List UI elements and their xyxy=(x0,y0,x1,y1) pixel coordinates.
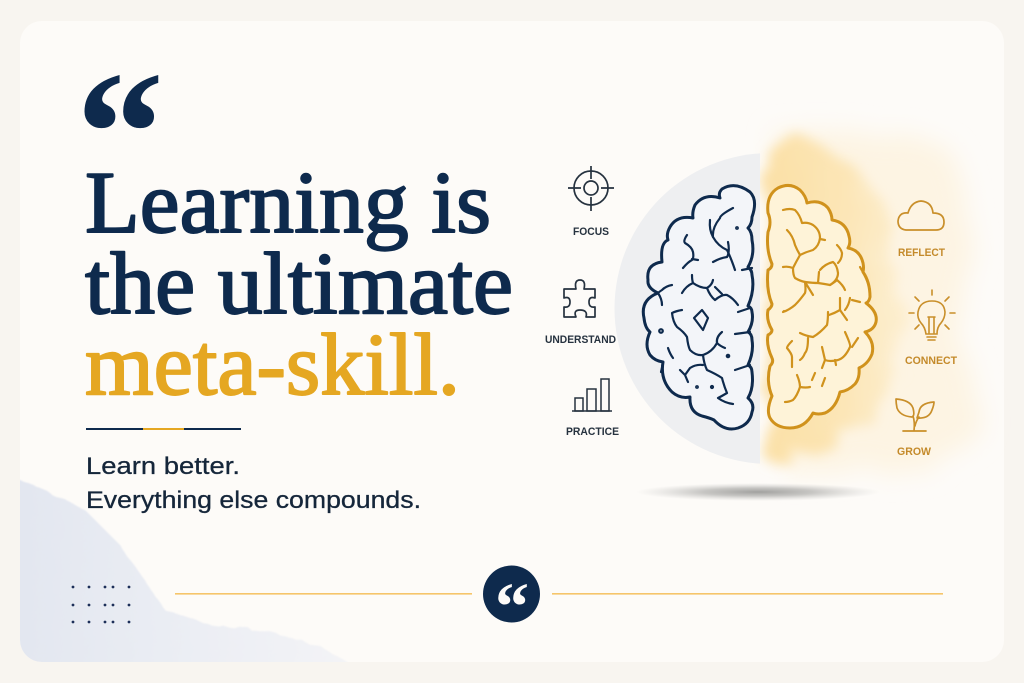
label: grow: GROW xyxy=(897,446,932,458)
footer divider with quote badge xyxy=(175,566,943,644)
icon: puzzle piece xyxy=(564,280,595,317)
subtitle: Learn better. xyxy=(86,453,240,480)
title line 2: the ultimate xyxy=(85,236,513,333)
gray half circle xyxy=(614,154,760,464)
label: focus: FOCUS xyxy=(573,226,609,238)
opening quotation mark: “ xyxy=(76,36,164,231)
icon: sprout xyxy=(896,399,934,431)
label: understand: UNDERSTAND xyxy=(545,334,616,346)
label: practice: PRACTICE xyxy=(566,426,619,438)
quote badge: “ xyxy=(495,568,529,644)
subtitle xyxy=(86,453,421,514)
icon: focus target xyxy=(568,166,614,211)
floor shadow xyxy=(636,483,880,501)
subtitle: Everything else compounds. xyxy=(86,487,421,514)
icon: cloud xyxy=(898,201,944,230)
right brain hemisphere xyxy=(768,185,876,428)
title line 3: highlight: meta-skill. xyxy=(85,317,460,414)
left brain hemisphere xyxy=(643,186,755,429)
watercolor wash: blue corner xyxy=(20,480,345,662)
brain illustration xyxy=(614,125,980,501)
quote badge xyxy=(483,566,540,644)
title xyxy=(85,155,513,414)
label: reflect: REFLECT xyxy=(898,247,945,259)
dot grid xyxy=(72,586,130,623)
icon: light bulb xyxy=(909,290,955,340)
label: connect: CONNECT xyxy=(905,355,957,367)
title rule xyxy=(86,428,241,430)
gold watercolor wash xyxy=(768,125,980,475)
title line 1: Learning is xyxy=(85,155,491,252)
icon: bar chart xyxy=(572,379,612,411)
